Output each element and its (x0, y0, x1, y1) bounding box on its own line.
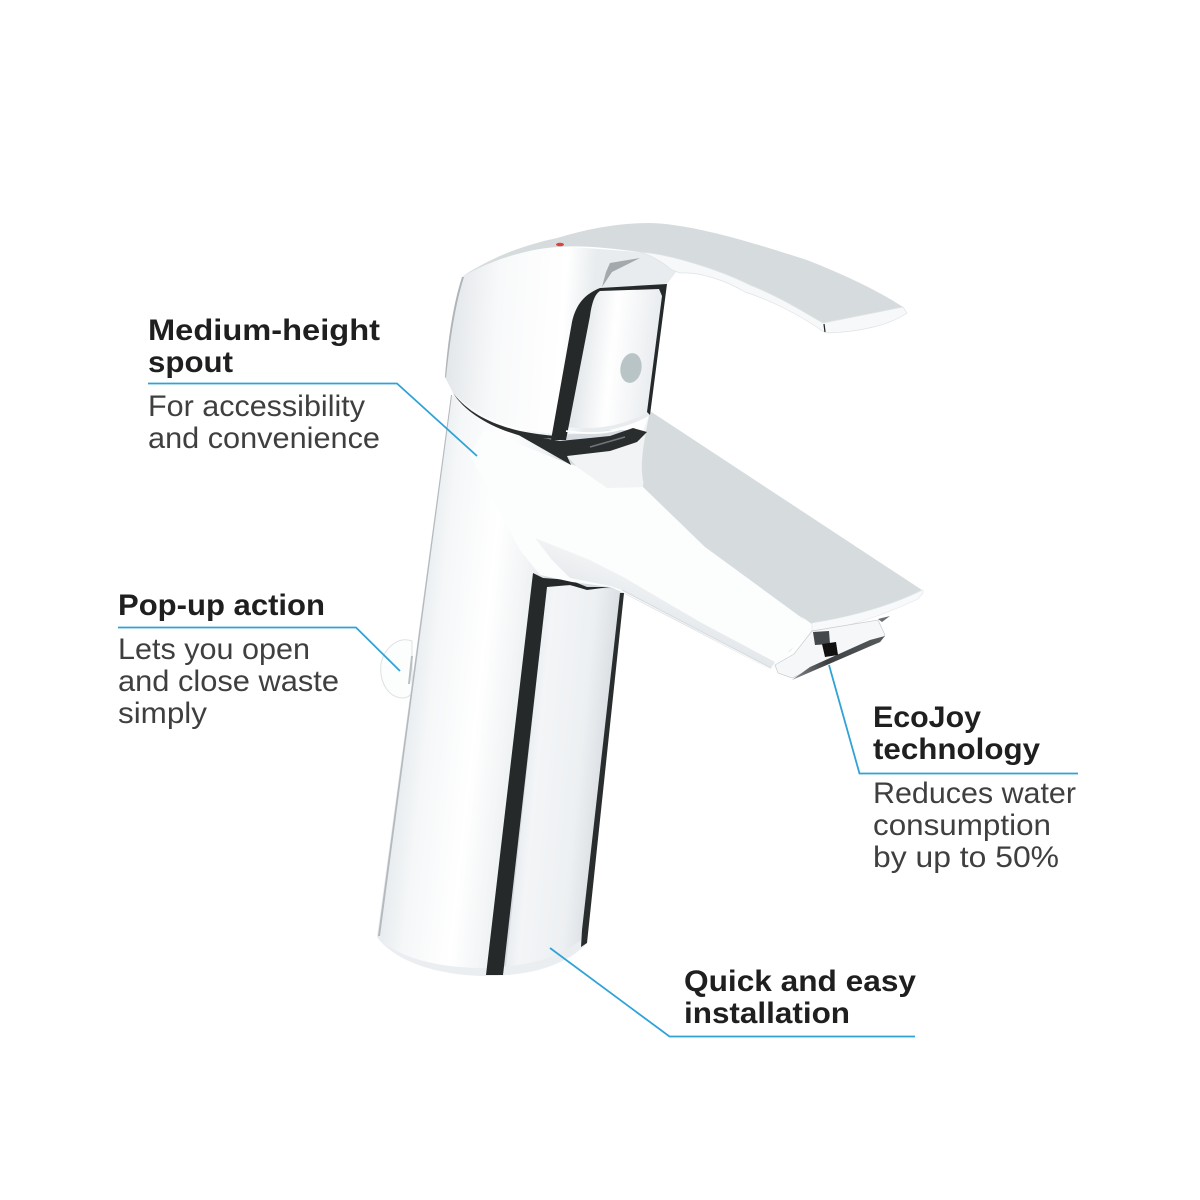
leader line (148, 384, 477, 456)
faucet illustration (377, 223, 923, 976)
description: Lets you open (118, 633, 310, 666)
aerator (775, 616, 890, 680)
description line two: consumption (873, 809, 1051, 842)
description line three: by up to 50% (873, 841, 1059, 874)
callout: EcoJoy technology (829, 665, 1078, 874)
underside shading (535, 538, 775, 668)
heading line two: installation (684, 997, 850, 1030)
callout: quick and easy installation (550, 948, 916, 1036)
leader line (118, 628, 400, 671)
description: Reduces water (873, 777, 1076, 810)
leader line (550, 948, 915, 1036)
heading line two: spout (148, 346, 233, 379)
hot indicator (556, 243, 564, 246)
valve dot (618, 351, 644, 385)
handle inner panel (568, 287, 664, 428)
heading: Pop-up action (118, 589, 325, 622)
dark reflection on hub (551, 284, 667, 440)
handle hub (445, 247, 680, 434)
spout front edge (812, 590, 923, 632)
description line three: simply (118, 697, 207, 730)
spout top surface (642, 411, 922, 625)
heading line two: technology (873, 733, 1040, 766)
heading: EcoJoy (873, 701, 981, 734)
heading: Medium-height (148, 314, 380, 347)
heading: Quick and easy (684, 965, 916, 998)
lever front edge (640, 252, 907, 333)
collar ring (453, 393, 647, 465)
icon: pop-up knob (381, 640, 413, 698)
callout: medium-height spout (148, 314, 477, 456)
callout: pop-up action (118, 589, 400, 730)
lever handle (445, 223, 907, 440)
description: For accessibility (148, 390, 365, 423)
dark edge strip (581, 593, 624, 947)
spout (470, 411, 923, 680)
leader line (829, 665, 1078, 774)
area under collar (567, 412, 650, 488)
dark reflection strip (486, 573, 610, 975)
faucet body column (377, 395, 813, 976)
lever top surface (462, 223, 903, 323)
description line two: and close waste (118, 665, 339, 698)
description line two: and convenience (148, 422, 380, 455)
